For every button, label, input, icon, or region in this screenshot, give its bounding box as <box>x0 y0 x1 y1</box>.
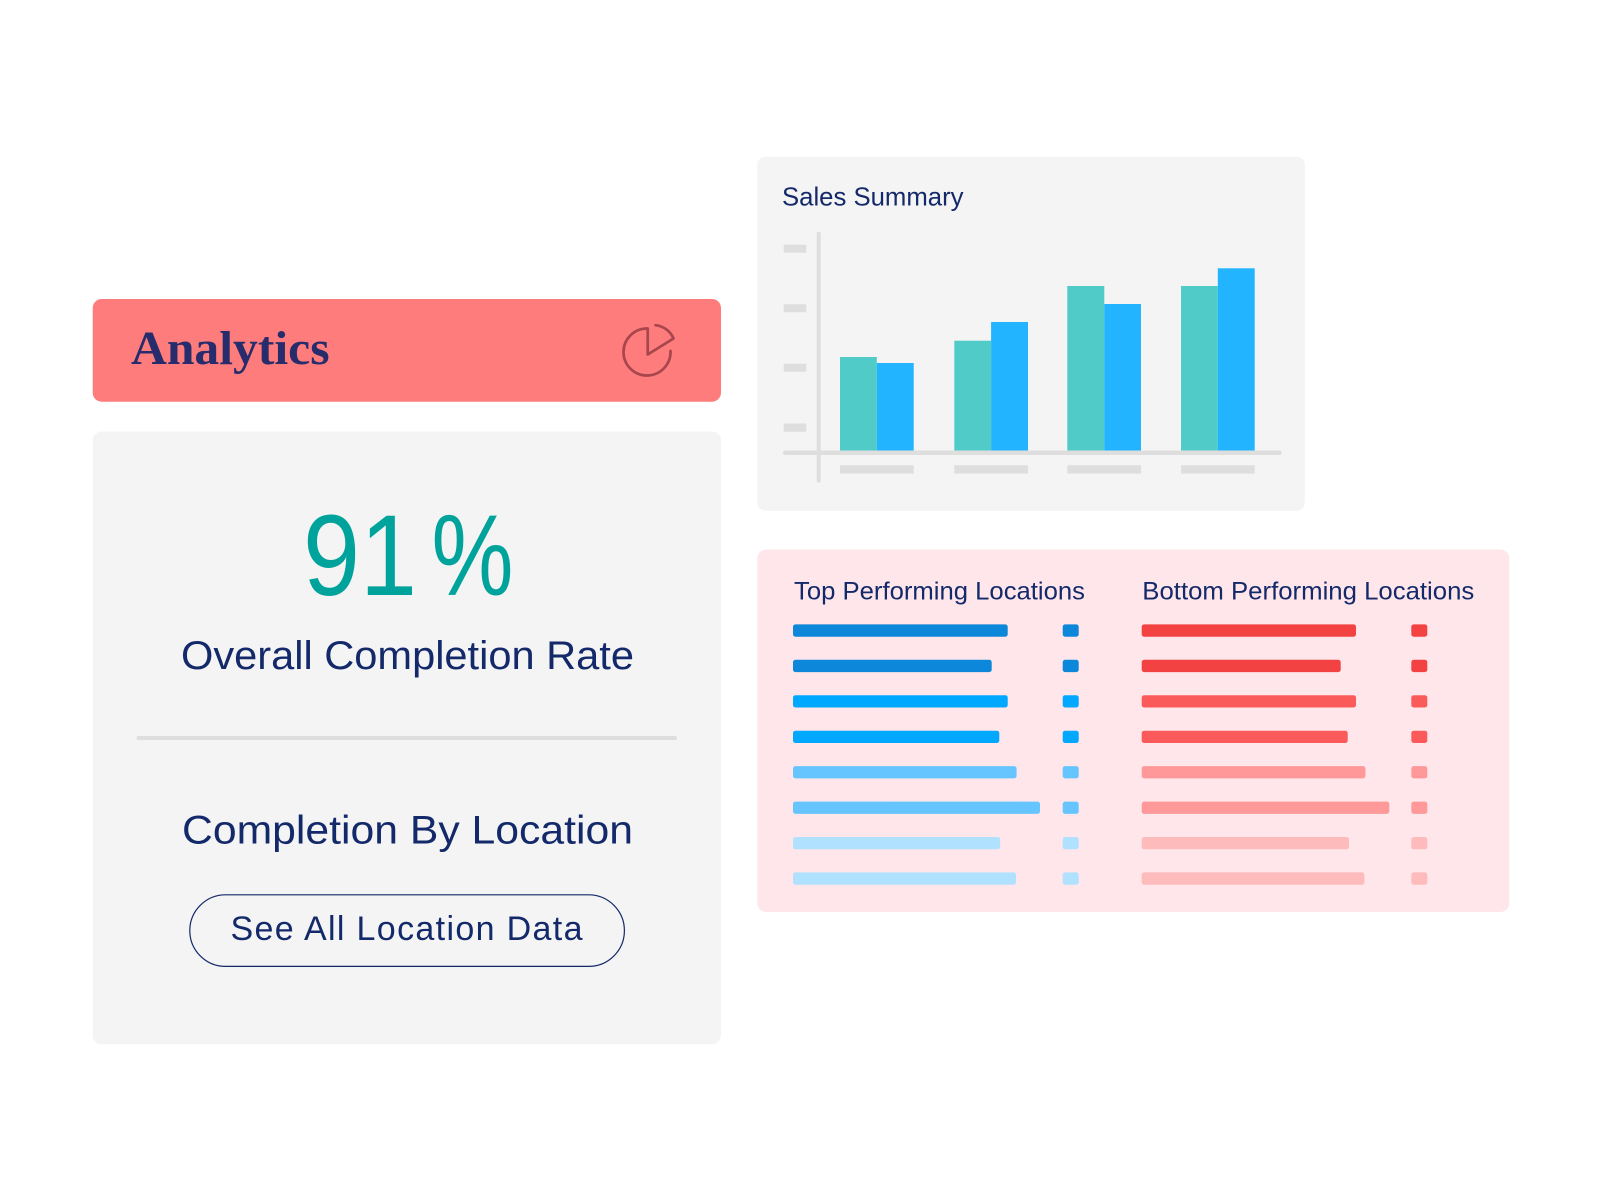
bar chart: sales <box>783 232 1282 483</box>
heading: Analytics: Analytics <box>131 322 330 375</box>
panel: analytics header <box>93 299 721 402</box>
heading: completion by location: Completion By Location <box>182 808 633 852</box>
bars: group 4 <box>1181 268 1255 450</box>
stat: 91 percent: % <box>432 492 514 620</box>
bars: group 2 <box>954 322 1028 450</box>
label: overall completion rate: Overall Completion Rate <box>181 634 634 678</box>
button: see all location data: See All Location Data <box>230 910 583 948</box>
bars: group 1 <box>840 357 914 450</box>
heading: bottom performing locations: Bottom Performing Locations <box>1142 577 1474 605</box>
icon: pie chart <box>624 325 674 376</box>
stat: 91 percent: 91 <box>303 492 417 620</box>
list: bottom performing bars <box>1142 624 1427 885</box>
axes <box>783 232 1282 483</box>
list: top performing bars <box>793 624 1079 885</box>
y axis ticks <box>784 245 806 432</box>
stat: 91 percent <box>303 492 514 620</box>
panel: locations <box>757 550 1509 912</box>
heading: top performing locations: Top Performing Locations <box>794 577 1085 605</box>
heading: sales summary: Sales Summary <box>782 182 964 212</box>
bars: group 3 <box>1067 286 1141 450</box>
button: see all location data <box>190 895 624 966</box>
panel: completion rate <box>93 432 721 1044</box>
panel: sales summary <box>757 157 1305 511</box>
x axis labels <box>840 465 1255 474</box>
